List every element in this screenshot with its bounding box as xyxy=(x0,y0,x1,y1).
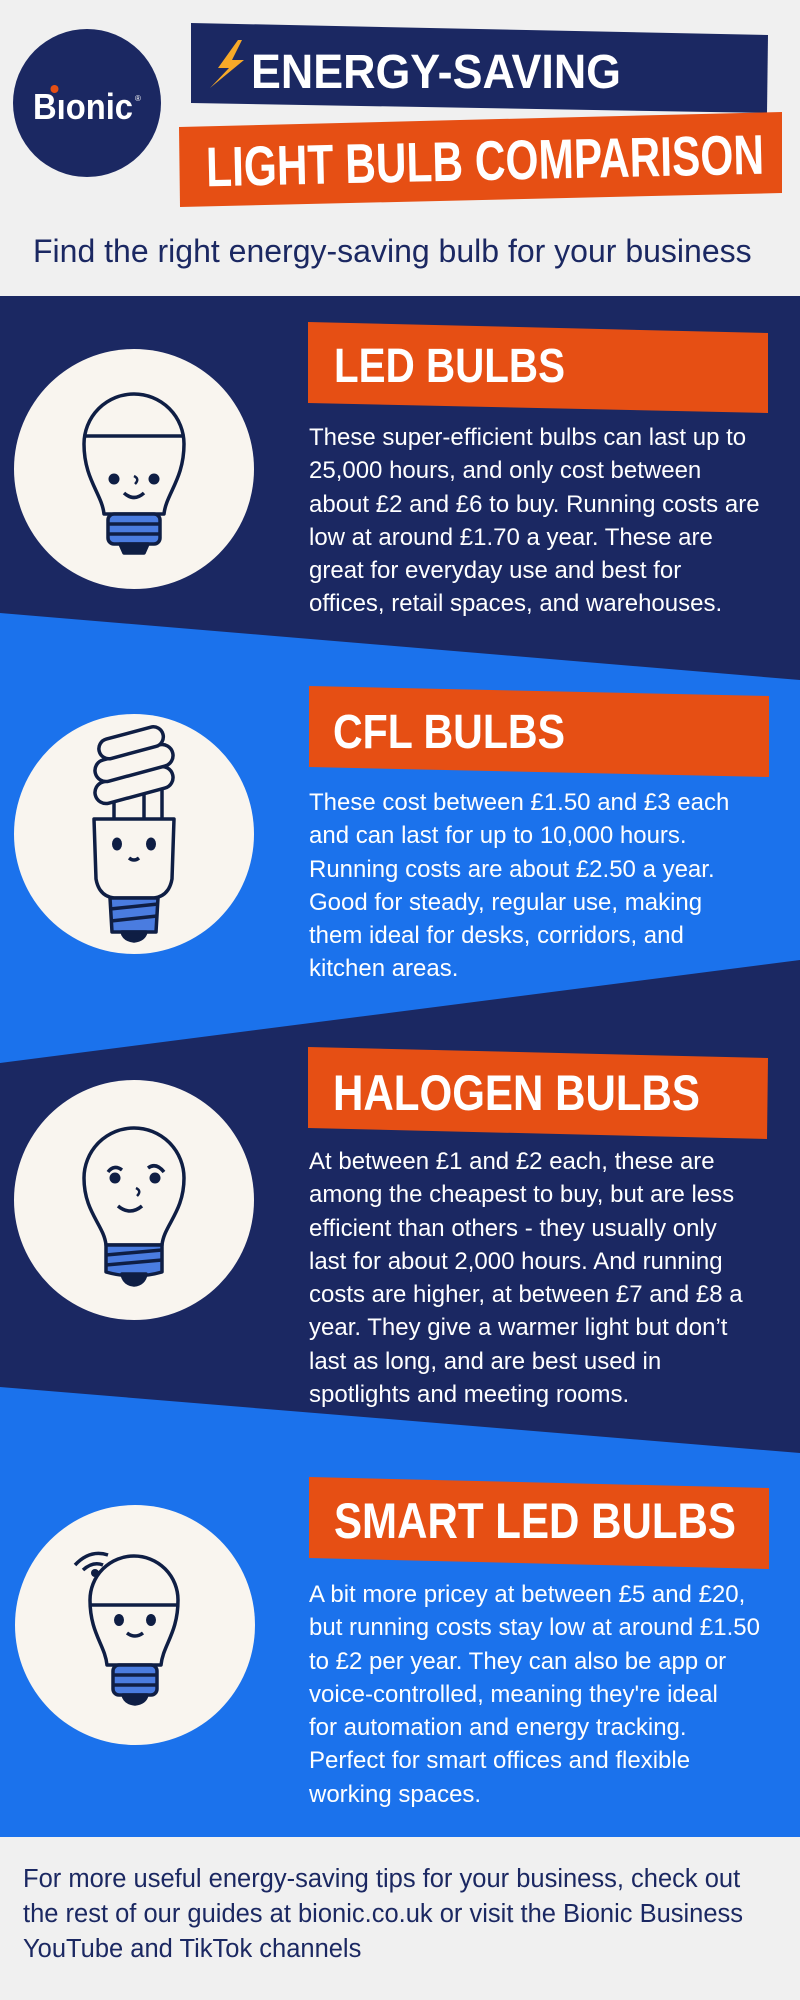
text: Smart LED xyxy=(309,1581,760,1808)
text: Halogen: last for about 2,000 hours. And running xyxy=(309,1248,723,1275)
heading: LED bulbs: LED BULBS xyxy=(334,340,565,393)
heading: LED bulbs xyxy=(308,322,768,413)
icon: smart LED bulb xyxy=(15,1505,255,1745)
text: LED: low at around £1.70 a year. These are xyxy=(309,524,713,551)
footer text: the rest of our guides at bionic.co.uk or visit the Bionic Business xyxy=(23,1900,743,1928)
logo: Bionic xyxy=(13,29,161,177)
text: Smart LED: voice-controlled, meaning they're ideal xyxy=(309,1681,718,1708)
panel: CFL xyxy=(14,686,769,954)
text: CFL: These cost between £1.50 and £3 each xyxy=(309,789,729,816)
heading: CFL bulbs xyxy=(309,686,769,777)
text: Smart LED: to £2 per year. They can also be app or xyxy=(309,1648,726,1675)
text: Halogen: At between £1 and £2 each, these are xyxy=(309,1148,715,1175)
icon: LED bulb xyxy=(14,349,254,589)
text: Halogen xyxy=(309,1148,743,1408)
text: LED: These super-efficient bulbs can last up to xyxy=(309,424,746,451)
text: Smart LED: Perfect for smart offices and flexible xyxy=(309,1747,690,1774)
icon: CFL bulb xyxy=(14,714,254,954)
text: Smart LED: working spaces. xyxy=(309,1781,481,1808)
text: Halogen: costs are higher, at between £7 and £8 a xyxy=(309,1281,743,1308)
text: Halogen: year. They give a warmer light but don’t xyxy=(309,1314,727,1341)
heading: Halogen bulbs: HALOGEN BULBS xyxy=(333,1065,700,1121)
panel: Halogen xyxy=(14,1047,768,1320)
text: LED: great for everyday use and best for xyxy=(309,557,681,584)
text: CFL xyxy=(309,789,729,982)
text: CFL: kitchen areas. xyxy=(309,955,458,982)
logo: Bionic: ® xyxy=(135,94,141,103)
text: Halogen: last as long, and are best used in xyxy=(309,1348,661,1375)
panel: LED xyxy=(14,322,768,589)
footer text: For more useful energy-saving tips for your business, check out xyxy=(23,1865,740,1893)
text: Smart LED: A bit more pricey at between £5 and £20, xyxy=(309,1581,745,1608)
subtitle: Find the right energy-saving bulb for your business xyxy=(33,233,752,269)
logo: Bionic: Bıonic xyxy=(33,86,133,127)
text: CFL: Good for steady, regular use, making xyxy=(309,889,702,916)
text: Halogen: among the cheapest to buy, but are less xyxy=(309,1181,734,1208)
footer text xyxy=(23,1865,743,1963)
text: LED: about £2 and £6 to buy. Running costs are xyxy=(309,491,760,518)
heading: Smart LED bulbs xyxy=(309,1477,769,1569)
heading: CFL bulbs: CFL BULBS xyxy=(333,706,565,759)
banner: energy-saving: ENERGY-SAVING xyxy=(251,46,621,99)
text: Smart LED: for automation and energy tracking. xyxy=(309,1714,687,1741)
banner: energy-saving xyxy=(191,23,768,113)
text: Smart LED: but running costs stay low at around £1.50 xyxy=(309,1614,760,1641)
icon: halogen bulb xyxy=(14,1080,254,1320)
heading: Halogen bulbs xyxy=(308,1047,768,1139)
panel: Smart LED xyxy=(15,1477,769,1745)
icon: lightning xyxy=(210,40,244,88)
text: LED: offices, retail spaces, and warehouses. xyxy=(309,590,722,617)
footer text: YouTube and TikTok channels xyxy=(23,1935,361,1963)
text: LED xyxy=(309,424,760,617)
title banners xyxy=(179,23,782,207)
text: LED: 25,000 hours, and only cost between xyxy=(309,457,701,484)
text: CFL: and can last for up to 10,000 hours. xyxy=(309,822,687,849)
text: Halogen: spotlights and meeting rooms. xyxy=(309,1381,629,1408)
text: CFL: Running costs are about £2.50 a year. xyxy=(309,856,715,883)
text: Halogen: efficient than others - they usually only xyxy=(309,1215,717,1242)
text: CFL: them ideal for desks, corridors, and xyxy=(309,922,684,949)
